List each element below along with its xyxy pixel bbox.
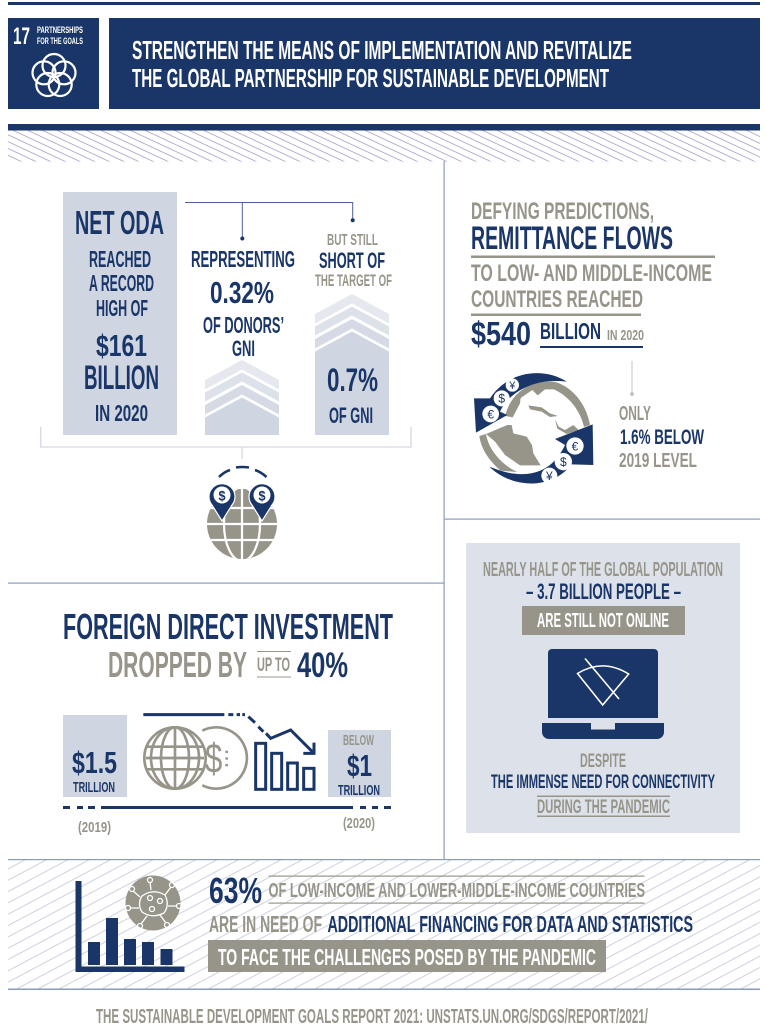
icon: globe with currency arrows: $ [498,392,505,406]
2020 value box [328,730,391,799]
text: 63% need financing: 63% [209,870,262,911]
text: short of target 0.7%: OF GNI [329,403,373,428]
text: 63% need financing [208,870,693,972]
heading: remittance text: IN 2020 [607,328,644,344]
year labels: (2020) [343,816,375,832]
net ODA box: BILLION [84,359,159,397]
goal name: PARTNERSHIPS [37,25,83,36]
heading: remittance text [471,198,715,352]
text: representing 0.32% [191,246,295,361]
callout: 1.6% below [619,361,704,472]
icon: globe, coin and falling bars [143,715,314,789]
chevron column: target [315,294,389,435]
2019 value box [63,715,127,797]
icon: globe with currency arrows: $ [560,455,567,469]
goal name [37,25,83,47]
heading: FDI: 40% [297,646,348,685]
text: 63% need financing: ARE IN NEED OF [209,911,322,937]
icon: globe with currency arrows: € [572,439,579,453]
text: short of target 0.7%: BUT STILL [327,232,378,249]
panel: data financing [8,859,760,990]
heading: FDI: UP TO [257,654,290,676]
icon: globe with currency arrows: € [487,407,494,421]
panel: foreign direct investment [63,606,393,836]
2019 value box: TRILLION [73,780,115,796]
text: short of target 0.7% [315,232,392,428]
heading: FDI: FOREIGN DIRECT INVESTMENT [63,606,393,647]
heading: remittance text: $540 [471,315,531,352]
connector lines [185,202,355,240]
icon: globe with currency arrows: ¥ [545,469,553,483]
icon: virus [126,876,182,930]
text: short of target 0.7%: 0.7% [327,362,378,398]
2020 value box: BELOW [343,732,374,749]
text: representing 0.32%: REPRESENTING [191,246,295,272]
icon: globe, coin and falling bars: $ [205,734,222,781]
goal badge [8,18,99,109]
year labels [78,816,375,836]
heading: FDI: DROPPED BY [108,644,247,685]
callout: 1.6% below: ONLY [619,402,651,425]
text: connectivity need: DESPITE [580,751,626,772]
2020 value box: TRILLION [338,783,380,799]
goal name: FOR THE GOALS [37,36,83,47]
icon: globe with dollar pins [207,466,277,559]
heading: remittance text: COUNTRIES REACHED [471,286,643,313]
icon: globe with dollar pins: $ [258,488,266,504]
net ODA box: HIGH OF [96,295,148,321]
net ODA box: IN 2020 [95,400,148,426]
panel: net ODA [41,192,411,561]
heading: FDI [63,606,393,685]
net ODA box [63,192,177,435]
text: connectivity need [491,751,715,818]
text: representing 0.32%: GNI [232,336,255,361]
2020 value box: $1 [347,748,372,783]
title banner [109,18,760,109]
net ODA box: NET ODA [75,205,164,242]
panel: remittance flows [471,198,715,484]
text: connectivity need: DURING THE PANDEMIC [537,797,670,818]
net ODA box: A RECORD [89,270,154,296]
text: not online: ARE STILL NOT ONLINE [537,610,669,632]
heading: remittance text: DEFYING PREDICTIONS, [471,198,654,225]
icon: globe with currency arrows: ¥ [508,380,515,392]
icon: laptop without wifi [542,649,664,739]
year labels: (2019) [78,820,111,836]
text: representing 0.32%: 0.32% [210,275,274,310]
icon: five-ring flower [32,54,76,96]
chevron column: donors [205,360,279,435]
icon: globe with dollar pins: $ [218,488,226,504]
goal number: 17 [13,23,30,50]
callout: 1.6% below: 1.6% BELOW [620,426,704,449]
2019 value box: $1.5 [72,745,117,780]
timeline [63,806,391,809]
callout: 1.6% below: 2019 LEVEL [619,449,697,472]
icon: bar chart [76,881,184,972]
panel: internet access [466,543,740,833]
text: not online [483,559,723,635]
net ODA box: REACHED [89,246,151,272]
text: representing 0.32%: OF DONORS’ [203,312,284,338]
icon: globe with currency arrows [474,373,593,484]
text: short of target 0.7%: THE TARGET OF [315,271,392,290]
heading: remittance text: BILLION [540,318,601,344]
text: short of target 0.7%: SHORT OF [319,248,385,273]
net ODA box: $161 [96,328,147,363]
